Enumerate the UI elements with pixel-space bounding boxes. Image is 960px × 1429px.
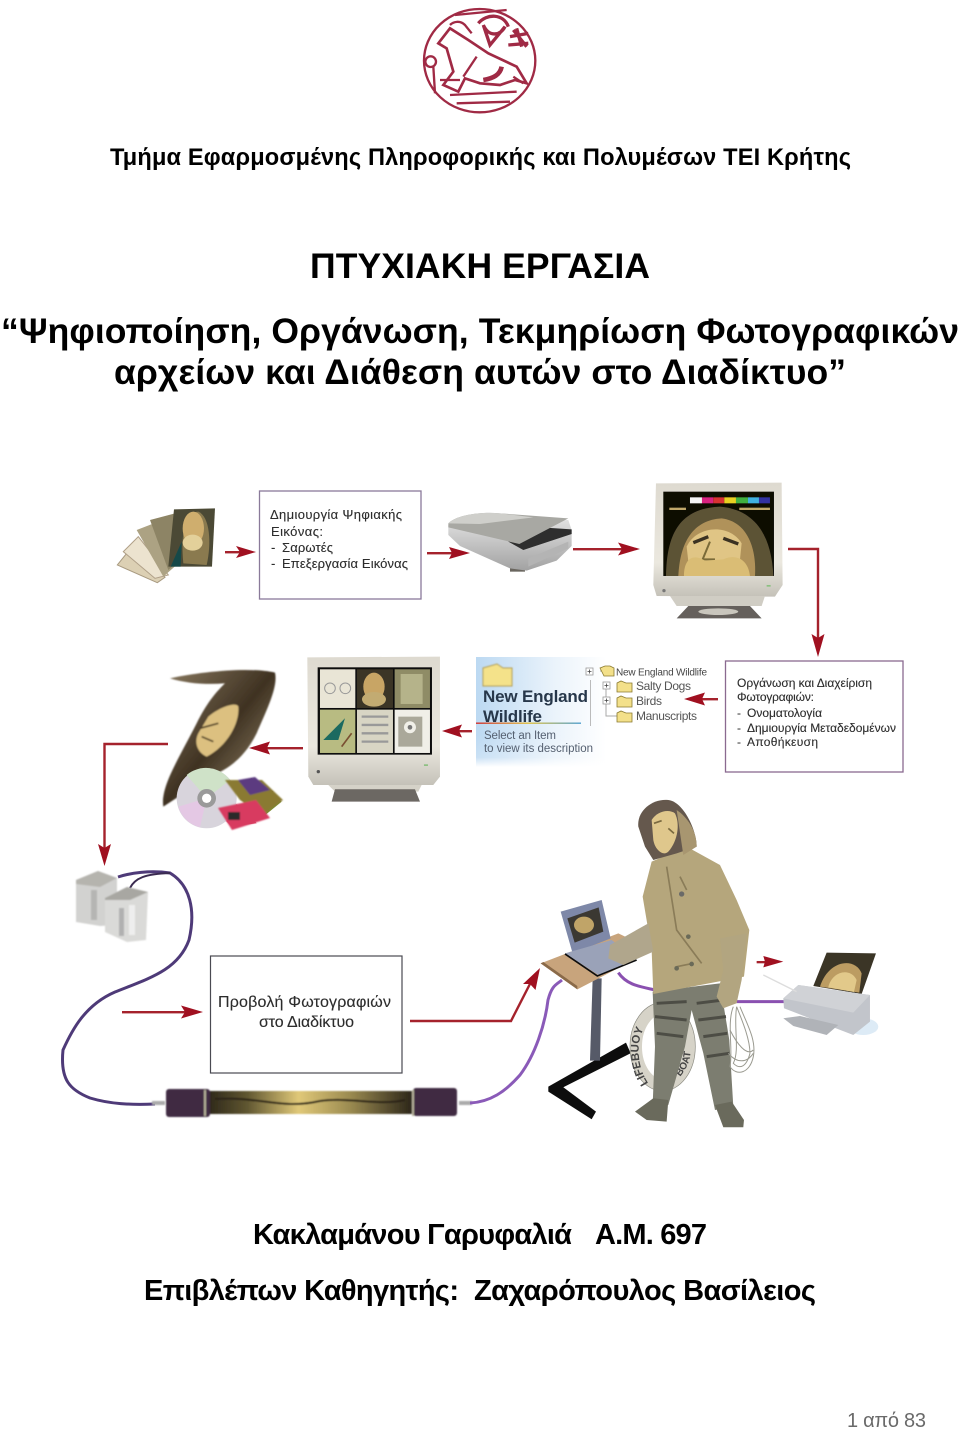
fisherman's trousers and boots: [635, 983, 744, 1127]
text block: viewing photographs online: στο Διαδίκτυο: [259, 1014, 354, 1031]
printer with portrait: [763, 953, 878, 1035]
cable: server to connector tube: [62, 872, 192, 1104]
icon: stack of photographs: [117, 508, 215, 583]
text: author and student ID: Κακλαμάνου Γαρυφαλιά: [253, 1219, 572, 1251]
cable: connector tube to laptop table: [470, 980, 562, 1103]
header: department line: Τμήμα Εφαρμοσμένης Πληροφορικής και Πολυμέσων ΤΕΙ Κρήτης: [110, 145, 851, 171]
text block: organisation steps: -: [737, 721, 741, 735]
text: New England Wildlife heading: [483, 687, 588, 726]
text block: organisation steps: -: [737, 706, 741, 720]
text block: digital image creation: Επεξεργασία Εικόνας: [282, 556, 408, 571]
head and hood: [638, 800, 697, 860]
panel: viewing photographs online: [210, 956, 402, 1073]
text: New England Wildlife heading: New England: [483, 687, 588, 706]
coat: [608, 847, 749, 1008]
arrow: web viewing box to laptop: [410, 968, 540, 1021]
folder tree: New England Wildlife: [616, 668, 707, 678]
laptop with portrait: [561, 900, 637, 976]
icon: floppy disks lower part: [218, 777, 283, 830]
text: select an item prompt: Select an Item: [484, 730, 556, 742]
icon: folder: [483, 664, 512, 686]
icon: connector tube with portrait: [152, 1088, 472, 1117]
text block: digital image creation: -: [271, 556, 275, 571]
lifebuoy ring: LIFEBUOY: [630, 1026, 648, 1087]
illustration: laptop on table, fisherman and printer: [540, 800, 878, 1128]
text block: viewing photographs online: [218, 994, 391, 1031]
text: select an item prompt: [484, 730, 593, 755]
folder tree: Birds: [636, 694, 662, 708]
text: supervisor: Ζαχαρόπουλος Βασίλειος: [474, 1275, 816, 1307]
text block: digital image creation: Δημιουργία Ψηφιακής: [270, 507, 402, 522]
arrow: scanner to monitor: [573, 542, 640, 556]
panel: digital image creation: [260, 491, 421, 599]
text block: organisation steps: Ονοματολογία: [747, 706, 822, 720]
panel: photo organisation and management: [726, 661, 903, 772]
arrow: gallery monitor to storage: [249, 742, 303, 754]
icon: portrait swirl with CD and floppy disks: [163, 670, 282, 828]
arrow: monitor down to organisation box: [788, 549, 824, 657]
heading: thesis label: ΠΤΥΧΙΑΚΗ ΕΡΓΑΣΙΑ: [310, 246, 650, 286]
icon: monitor with portrait: [653, 483, 783, 618]
title: thesis title: αρχείων και Διάθεση αυτών στο Διαδίκτυο”: [114, 352, 846, 392]
text: select an item prompt: to view its description: [484, 743, 593, 755]
title: thesis title: [1, 311, 959, 392]
rope coil: [728, 1007, 754, 1072]
arrow: box to scanner: [427, 547, 470, 559]
text block: organisation steps: -: [737, 735, 741, 749]
title: thesis title: “Ψηφιοποίηση, Οργάνωση, Τεκμηρίωση Φωτογραφικών: [1, 311, 959, 351]
table base and stand: [548, 978, 631, 1119]
lifebuoy ring: [630, 1004, 696, 1090]
folder tree: [586, 666, 707, 726]
text block: organisation steps: [737, 676, 896, 749]
arrow: photos to box: [225, 546, 256, 558]
icon: monitor with image gallery: [307, 657, 440, 802]
folder tree: Salty Dogs: [636, 679, 691, 693]
text block: organisation steps: Φωτογραφιών:: [737, 690, 814, 704]
text: author and student ID: Α.Μ. 697: [595, 1219, 707, 1251]
red arrow to printer: [757, 956, 783, 967]
text: supervisor: [144, 1275, 816, 1307]
panel: New England Wildlife browser screenshot: [476, 657, 707, 767]
text: supervisor: Επιβλέπων Καθηγητής:: [144, 1275, 459, 1307]
text block: digital image creation: Σαρωτές: [282, 540, 333, 555]
text block: viewing photographs online: Προβολή Φωτογραφιών: [218, 994, 391, 1011]
icon: server towers: [76, 871, 148, 942]
icon: flatbed scanner: [448, 513, 572, 572]
purple cables: [618, 973, 785, 1002]
arrow: storage to servers: [98, 744, 168, 866]
logo: TEI Crete seal: [424, 9, 535, 112]
arrow: browser to gallery monitor: [442, 724, 472, 738]
text block: organisation steps: Οργάνωση και Διαχείριση: [737, 676, 872, 690]
text block: organisation steps: Αποθήκευση: [747, 735, 818, 749]
text: New England Wildlife heading: Wildlife: [483, 707, 542, 726]
text block: digital image creation: -: [271, 540, 275, 555]
arrow: servers to web viewing box: [122, 1006, 203, 1018]
table top: [541, 933, 653, 989]
arrow: organisation box to folder tree: [684, 692, 718, 706]
text block: organisation steps: Δημιουργία Μεταδεδομένων: [747, 721, 896, 735]
text block: digital image creation: Εικόνας:: [271, 524, 323, 539]
folder tree: Manuscripts: [636, 709, 697, 723]
lifebuoy ring: BOAT: [677, 1050, 690, 1076]
text block: digital image creation: [270, 507, 408, 571]
